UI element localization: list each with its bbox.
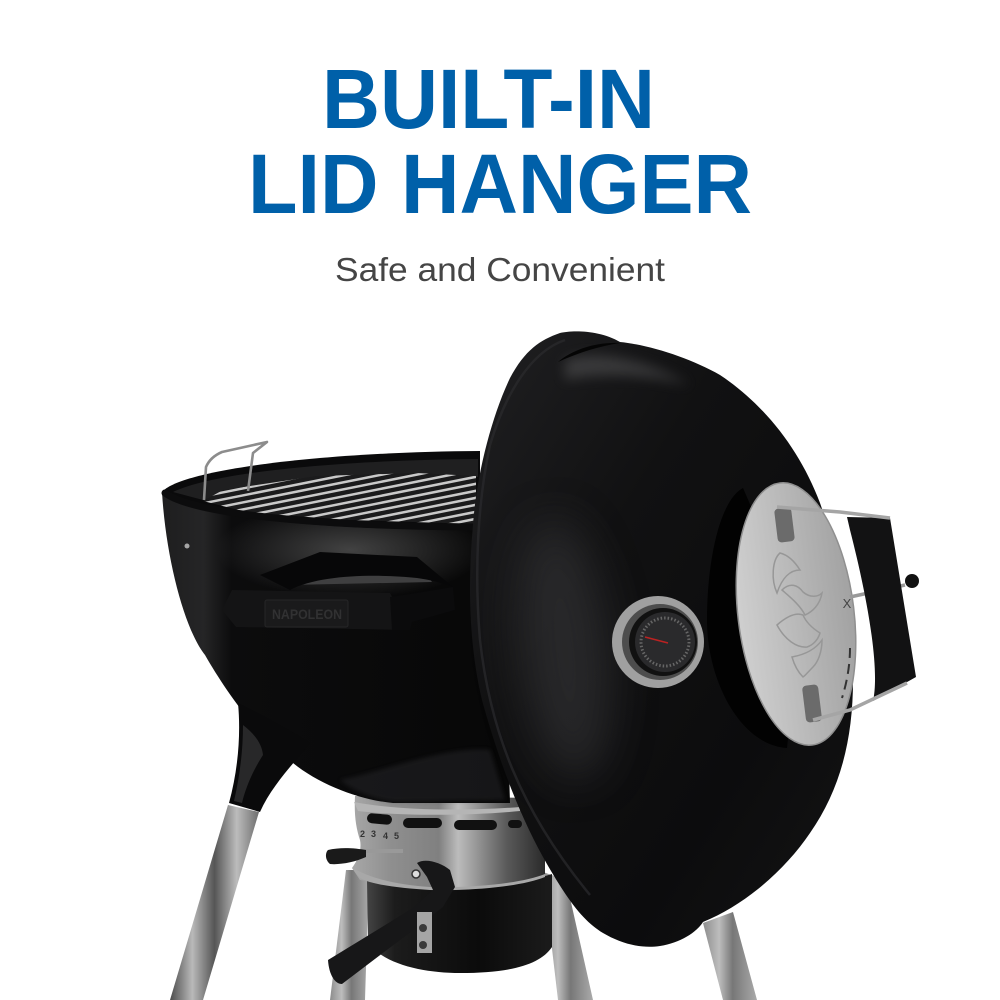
brand plate <box>265 600 348 627</box>
upper bracket <box>774 507 795 543</box>
temperature gauge <box>612 596 704 688</box>
handle bar <box>222 590 410 630</box>
bowl side handle <box>222 552 455 630</box>
lid hanger plate <box>722 476 870 752</box>
centre leg <box>330 870 369 1000</box>
vent numbers: 4 <box>383 831 388 841</box>
bowl rim and interior <box>162 451 480 530</box>
top wire <box>777 507 890 518</box>
lower bracket <box>802 684 822 723</box>
bowl rim front <box>165 493 478 527</box>
ash catcher assembly <box>326 796 552 984</box>
brand plate: NAPOLEON <box>272 606 342 622</box>
vent slots <box>367 813 522 830</box>
title: BUILT-IN <box>322 52 655 146</box>
handle knob <box>905 574 919 588</box>
right leg <box>703 912 757 1000</box>
gauge dial <box>635 612 695 672</box>
title <box>248 52 752 231</box>
plate recess <box>707 488 800 748</box>
handle inner reflection <box>288 565 432 585</box>
bottom wire <box>813 683 907 720</box>
vent numbers <box>360 829 399 841</box>
ash lever <box>328 861 455 984</box>
lever bolt <box>412 870 420 878</box>
grill illustration <box>162 331 919 1000</box>
socket highlight <box>234 725 263 803</box>
lid hinge notch <box>558 343 620 362</box>
grate handle <box>204 442 267 500</box>
lid rim left <box>477 340 590 895</box>
vent numbers: 2 <box>360 829 365 839</box>
lid <box>470 331 853 947</box>
collar lower rim <box>352 868 545 890</box>
handle end <box>390 587 455 630</box>
plate tick marks <box>842 648 850 698</box>
vent numbers: 5 <box>394 831 399 841</box>
bowl <box>162 475 510 803</box>
lid shell <box>470 331 853 947</box>
ash cup <box>367 874 552 973</box>
lever bracket <box>417 912 432 953</box>
bowl sheen <box>215 502 485 598</box>
lid handle <box>777 507 919 720</box>
lid left sheen <box>507 516 623 784</box>
cooking grate <box>204 473 476 524</box>
back wall sheen <box>173 459 478 500</box>
plate emblem <box>773 553 822 677</box>
gauge bezel <box>612 596 704 688</box>
handle grip <box>847 517 916 701</box>
gauge needle <box>645 637 668 643</box>
title: LID HANGER <box>248 137 752 231</box>
leg socket <box>229 703 310 812</box>
steel collar <box>352 796 545 892</box>
collar top band <box>354 802 520 815</box>
front left leg <box>170 805 259 1000</box>
vent numbers: 3 <box>371 829 376 839</box>
vent lever <box>326 848 403 864</box>
plate X mark: X <box>843 596 852 611</box>
rear leg <box>543 872 593 1000</box>
handle top <box>260 552 453 590</box>
handle rod <box>850 585 905 597</box>
bowl rivet <box>184 544 190 548</box>
bowl underside reflection <box>340 749 505 802</box>
lid top highlight <box>565 355 690 385</box>
subtitle: Safe and Convenient <box>335 251 665 288</box>
